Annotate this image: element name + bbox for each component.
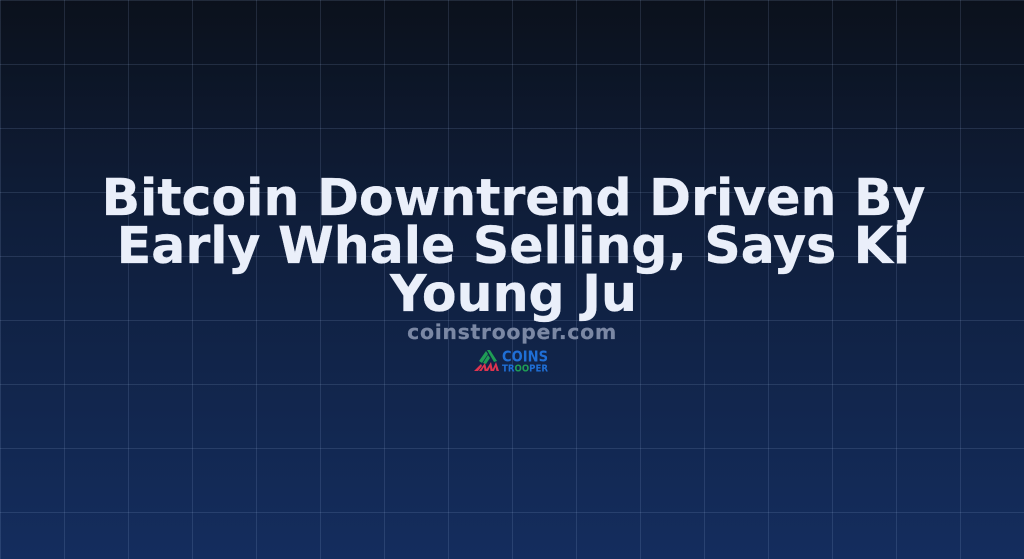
website address: coinstrooper.com	[407, 320, 617, 344]
title: Early Whale Selling, Says Ki	[117, 216, 910, 275]
logo wordmark	[502, 348, 548, 374]
logo mark: green and red chart peaks	[474, 350, 499, 371]
title	[102, 168, 925, 323]
title: Young Ju	[390, 264, 637, 323]
title: Bitcoin Downtrend Driven By	[102, 168, 925, 227]
icon: Coins Trooper logo	[474, 348, 548, 374]
